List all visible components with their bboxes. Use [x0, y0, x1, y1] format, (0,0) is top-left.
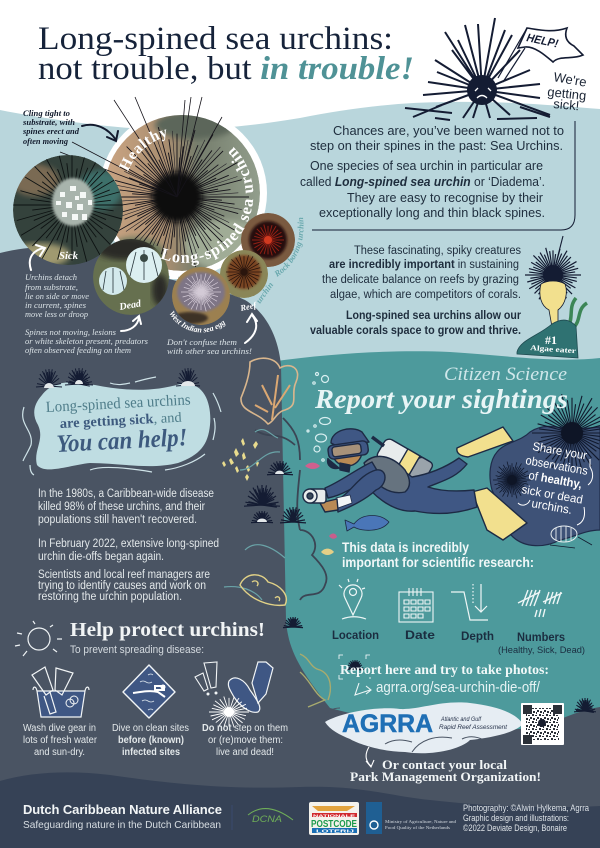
- text: contact park management: [350, 757, 541, 784]
- icon: tally marks: [518, 590, 562, 617]
- dead test shells: [257, 471, 284, 522]
- text block: history: killed 98% of these urchins, and their: [38, 501, 205, 513]
- heading: help protect urchins: Help protect urchins!: [70, 619, 265, 641]
- caption: clean sites: [112, 723, 189, 758]
- text block: intro: One species of sea urchin in particular are: [310, 159, 543, 173]
- white chip: [170, 273, 178, 279]
- footer: tagline: Safeguarding nature in the Dutch Caribbean: [23, 819, 221, 831]
- photo: healthy long-spined urchin: [107, 115, 260, 271]
- text block: importance: [310, 245, 521, 337]
- arrow: to healthy photo: [82, 125, 118, 141]
- caption: dead: or white skeleton present, predators: [25, 336, 149, 346]
- text block: importance: the delicate balance on reefs by grazing: [322, 274, 519, 286]
- text block: history: In the 1980s, a Caribbean-wide disease: [38, 488, 214, 500]
- fish: yellow: [321, 549, 334, 555]
- caption: clean sites: Dive on clean sites: [112, 723, 189, 734]
- seaweed: [568, 298, 587, 328]
- share text: sick or dead: [520, 482, 584, 507]
- text block: intro: They are easy to recognise by their: [347, 191, 543, 205]
- text: data is important: [342, 540, 534, 570]
- far arm: [325, 462, 378, 498]
- small arrows: [518, 459, 593, 525]
- text block: intro: [300, 124, 564, 220]
- glove: [320, 499, 338, 512]
- label: West Indian sea egg: West Indian sea egg: [170, 310, 226, 332]
- text block: history: populations still haven't recovered.: [38, 514, 197, 526]
- photo: west indian sea egg: [172, 267, 230, 325]
- yellow anemone spots: [222, 438, 259, 481]
- caption: sick: Urchins detach: [25, 272, 78, 282]
- footer: postcode loterij logo: NATIONALE: [313, 813, 356, 818]
- text block: importance: Long-spined sea urchins allow our: [346, 310, 521, 322]
- AGRRA logo cloud: [322, 702, 523, 753]
- caption: healthy behaviour: substrate, with: [22, 117, 75, 127]
- label: Healthy: Healthy: [118, 129, 166, 172]
- caption: healthy behaviour: often moving: [23, 136, 69, 146]
- caption: healthy behaviour: [22, 108, 80, 146]
- bubbles: [307, 372, 330, 461]
- arrow: contact: [366, 747, 374, 767]
- bracket line: [312, 121, 575, 230]
- AGRRA tagline: Atlantic and Gulf: [440, 716, 482, 723]
- background: footer band: [0, 772, 600, 848]
- text block: intro: step on their spines in the past: Sea Urchins.: [310, 139, 563, 153]
- footer: postcode loterij logo: LOTERIJ: [316, 828, 355, 834]
- label: Reef urchin: [238, 280, 275, 313]
- label: Reef urchin: Reef: [238, 300, 258, 313]
- urchin on ridge: [574, 698, 596, 712]
- we're getting sick: getting: [547, 84, 587, 103]
- blob text: Long-spined sea urchins: [45, 391, 191, 416]
- photo: rock boring urchin: [220, 250, 268, 298]
- footer: organisation name: Dutch Caribbean Nature Alliance: [23, 802, 222, 817]
- arrow: to dead photo: [121, 316, 141, 331]
- footer: postcode loterij logo: [309, 802, 359, 835]
- text block: importance: are incredibly important in sustaining: [329, 259, 519, 271]
- reef doodles: corals and urchins along the teal edge: [222, 358, 330, 707]
- fish: blue: [345, 515, 389, 531]
- text: report here: Report here and try to take photos:: [340, 662, 549, 677]
- caption: healthy behaviour: spines erect and: [22, 126, 80, 136]
- icon: sun: [15, 621, 62, 656]
- caption: sick: move less or droop: [25, 309, 89, 319]
- head: [332, 436, 362, 466]
- photo: reef urchin: [241, 213, 295, 267]
- face: [467, 75, 497, 105]
- caption: wash: [23, 723, 98, 758]
- mask: [327, 440, 369, 460]
- title: Long-spined sea urchins:: [38, 21, 393, 57]
- camera: [303, 489, 326, 503]
- coral: yellow wavy ridge: [300, 654, 330, 707]
- icon: depth: [451, 584, 488, 620]
- near arm: [336, 470, 385, 512]
- caption: sick: [25, 272, 89, 319]
- valve: [372, 437, 384, 446]
- spines: [405, 18, 550, 120]
- we're getting sick: We're: [552, 69, 588, 90]
- caption: do not step: live and dead!: [216, 747, 274, 758]
- icon: calendar: [399, 588, 433, 622]
- illustration: scuba diver: [303, 372, 527, 555]
- footer: credits: [463, 803, 589, 833]
- coral branches: [255, 375, 290, 420]
- title: not trouble, but in trouble!: [38, 51, 414, 87]
- label: Rock boring urchin: Rock boring urchin: [274, 218, 304, 277]
- text block: intro: exceptionally long and thin black spines.: [319, 206, 545, 220]
- data labels: Date: [405, 630, 435, 642]
- callout blob: you can help: are getting sick, and: [59, 411, 182, 432]
- icon: wash dive gear: [32, 667, 89, 717]
- text: data is important: important for scientific research:: [342, 555, 534, 570]
- icon: do not step: [195, 662, 273, 728]
- coral: yellow swirl: [240, 575, 286, 605]
- illustration: urchin calling for help: HELP!: [525, 32, 559, 51]
- urchins on blob: [36, 368, 200, 387]
- label: Long-spined sea urchin: Long-spined sea urchin: [160, 146, 254, 266]
- caption: clean sites: before (known): [118, 735, 184, 746]
- background: light blue band: [0, 102, 600, 380]
- white halo behind main photo: [99, 109, 267, 277]
- cuff: [336, 495, 352, 508]
- background: dark slate panel: [0, 247, 600, 848]
- text block: importance: algae, which are competitors of corals.: [330, 289, 521, 301]
- share text: Share your: [531, 439, 588, 463]
- urchins along the edge: [244, 461, 306, 628]
- regulator: [328, 458, 350, 472]
- data labels: Depth: [461, 631, 494, 643]
- vest: [364, 456, 410, 493]
- help flag: [518, 28, 583, 62]
- AGRRA tagline: [439, 716, 508, 731]
- caption: dead: often observed feeding on them: [25, 345, 131, 355]
- suit body and legs: [362, 458, 477, 514]
- subheading: To prevent spreading disease:: [70, 644, 204, 656]
- QR code: [521, 703, 564, 745]
- caption: sick: in current, spines: [25, 300, 87, 310]
- photo: dead urchin tests: [93, 236, 169, 315]
- caption: clean sites: infected sites: [122, 747, 180, 758]
- caption: do not confuse: with other sea urchins!: [167, 346, 252, 356]
- label: Reef urchin: urchin: [253, 280, 275, 305]
- caption: do not step: [202, 723, 288, 758]
- data labels: [332, 630, 565, 644]
- text block: history: [38, 488, 219, 603]
- cloud doodles: [322, 708, 484, 752]
- footer: DCNA logo: DCNA: [252, 814, 282, 824]
- caption: dead: [25, 327, 149, 355]
- skeleton urchin: [551, 526, 577, 542]
- illustration: algae eater urchin: [517, 236, 587, 358]
- text block: importance: valuable corals space to grow and thrive.: [310, 325, 521, 337]
- lower fin: [472, 488, 527, 540]
- AGRRA wordmark: AGRRA: [342, 710, 433, 738]
- callout blob: you can help: [23, 368, 221, 475]
- title: [38, 21, 414, 87]
- label: Sick: Sick: [59, 251, 78, 262]
- illustration: algae eater urchin: Algae eater: [530, 343, 577, 355]
- hood: [331, 429, 369, 446]
- link: agrra.org/sea-urchin-die-off/: [376, 680, 541, 696]
- footer: credits: Graphic design and illustrations:: [463, 813, 569, 823]
- icon: diver sign: [123, 665, 175, 718]
- small urchin: [493, 462, 531, 498]
- small urchin with photo frame: [339, 655, 370, 679]
- footer: postcode loterij logo: POSTCODE: [311, 818, 357, 830]
- text: contact park management: Or contact your local: [382, 757, 507, 772]
- footer: DCNA logo: [232, 805, 293, 830]
- text: contact park management: Park Management Organization!: [350, 769, 541, 784]
- share text: [520, 439, 589, 517]
- fish: small pink: [329, 533, 337, 539]
- upper fin: [457, 427, 513, 457]
- illustration: urchin calling for help: [405, 18, 588, 120]
- long spines extending past the photo: [60, 97, 222, 197]
- icon: location pin: [339, 579, 366, 619]
- blob swooshes: [23, 377, 221, 475]
- we're getting sick: sick!: [553, 96, 580, 113]
- footer: ministry logo: Ministry of Agriculture, Nature and: [385, 819, 456, 825]
- fork: [540, 281, 566, 327]
- caption: dead: Spines not moving, lesions: [25, 327, 117, 337]
- caption: do not step: or (re)move them:: [208, 735, 283, 746]
- caption: do not confuse: [166, 337, 252, 356]
- share text: of healthy,: [527, 468, 583, 491]
- callout blob: you can help: You can help!: [56, 424, 188, 458]
- caption: wash: Wash dive gear in: [23, 723, 96, 734]
- footer: credits: ©2022 Deviate Design, Bonaire: [463, 823, 567, 833]
- flag pole: [498, 28, 527, 82]
- arrow: to lookalikes: [245, 314, 257, 343]
- text block: history: restoring the urchin population.: [38, 591, 182, 603]
- text: data is important: This data is incredibly: [342, 540, 469, 555]
- share text: urchins.: [530, 496, 573, 517]
- text block: intro: Chances are, you’ve been warned not to: [333, 124, 564, 138]
- AGRRA tagline: Rapid Reef Assessment: [439, 724, 508, 731]
- caption: sick: lie on side or move: [25, 291, 89, 301]
- text block: importance: These fascinating, spiky creatures: [354, 245, 521, 257]
- we're getting sick: [547, 69, 588, 113]
- air tank: [375, 437, 434, 485]
- heading: report your sightings: Report your sightings: [314, 384, 568, 414]
- label: Dead: Dead: [118, 298, 143, 313]
- photo: sick urchin: [13, 155, 123, 265]
- footer: ministry logo: [366, 802, 456, 834]
- label: numbers detail: (Healthy, Sick, Dead): [498, 645, 585, 655]
- fish: pink: [305, 463, 320, 469]
- data labels: Location: [332, 630, 379, 642]
- caption: do not step: Do not step on them: [202, 723, 288, 734]
- badge text: #1: [545, 333, 557, 347]
- text block: history: trying to identify causes and work on: [38, 580, 206, 592]
- arrow: to sick photo: [30, 245, 45, 270]
- coral stems: [255, 418, 327, 600]
- urchin photo cluster: [13, 96, 304, 332]
- background: teal citizen science band: [270, 351, 600, 730]
- coral: tan branching: [241, 358, 298, 424]
- heading: citizen science: Citizen Science: [444, 364, 567, 385]
- teal wave lines: [224, 430, 285, 600]
- caption: sick: from substrate,: [25, 282, 78, 292]
- text block: history: In February 2022, extensive long-spined: [38, 538, 219, 550]
- caption: wash: and sun-dry.: [34, 747, 85, 758]
- caption: wash: lots of fresh water: [23, 735, 98, 746]
- callout blob: share observations: [490, 394, 600, 548]
- rock: [517, 320, 578, 358]
- text block: history: urchin die-offs began again.: [38, 551, 164, 563]
- footer: ministry logo: Food Quality of the Netherlands: [385, 825, 451, 830]
- text block: history: Scientists and local reef managers are: [38, 569, 210, 581]
- text block: intro: called Long-spined sea urchin or ‘Diadema’.: [300, 175, 545, 189]
- big urchin: [532, 394, 600, 472]
- caption: do not confuse: Don't confuse them: [166, 337, 237, 347]
- link arrow: [355, 683, 371, 695]
- share text: observations: [524, 453, 589, 478]
- caption: healthy behaviour: Cling tight to: [23, 108, 70, 118]
- data labels: Numbers: [517, 632, 565, 644]
